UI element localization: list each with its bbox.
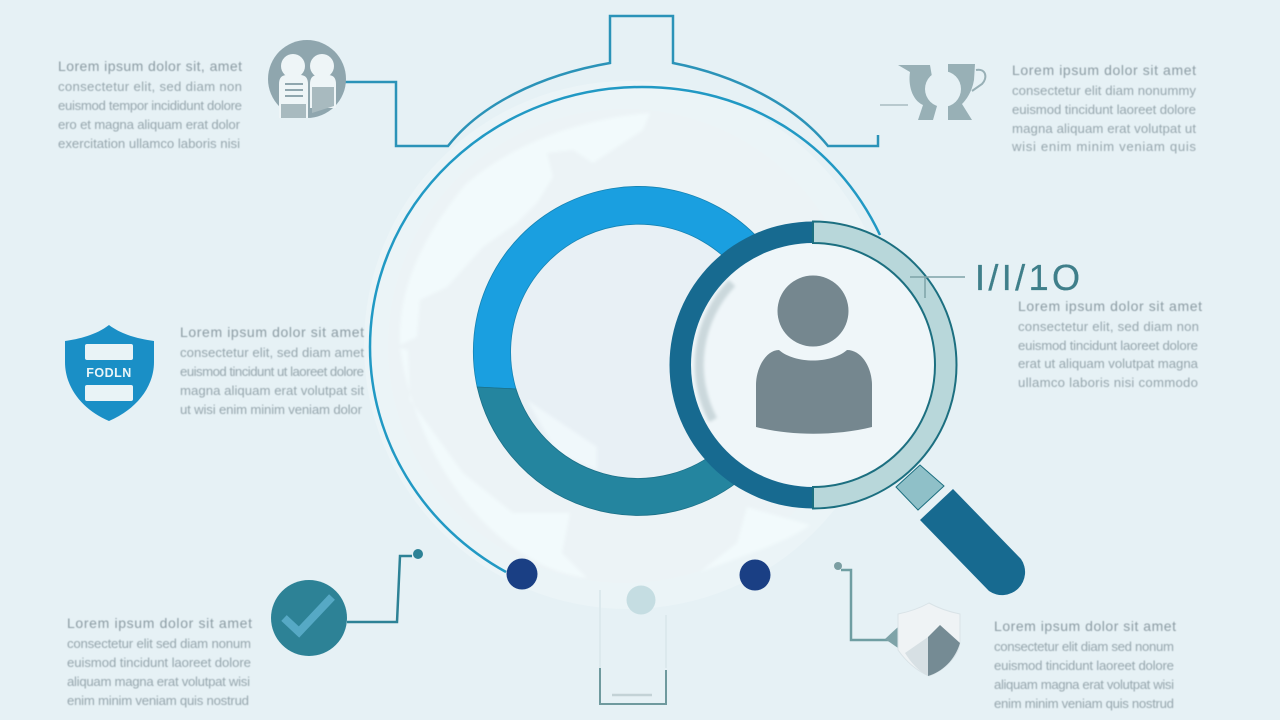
- text block: bottom right: [994, 618, 1176, 711]
- continent fragment in donut hole: [527, 400, 597, 470]
- text block: bottom left: Lorem ipsum dolor sit amet: [67, 615, 252, 631]
- text block: middle left: euismod tincidunt ut laoreet dolore: [180, 364, 364, 379]
- icon: trophy cups: [880, 64, 985, 120]
- lens inner shadow: [699, 283, 732, 420]
- text block: bottom right: enim minim veniam quis nostrud: [994, 696, 1174, 711]
- donut segment: blue: [473, 186, 760, 389]
- text block: middle right: erat ut aliquam volutpat magna: [1018, 356, 1199, 371]
- magnifying glass: [670, 222, 1025, 595]
- dots on ring: [506, 558, 770, 614]
- text block: bottom left: [67, 615, 252, 708]
- top connector line: [345, 16, 878, 146]
- text block: top left: [58, 58, 242, 151]
- text block: top left: consectetur elit, sed diam non: [58, 79, 242, 94]
- text block: bottom left: euismod tincidunt laoreet dolore: [67, 655, 251, 670]
- text block: top left: exercitation ullamco laboris nisi: [58, 136, 240, 151]
- text block: middle left: ut wisi enim minim veniam dolor: [180, 402, 363, 417]
- outer halo: [364, 81, 892, 609]
- text block: top right: wisi enim minim veniam quis: [1011, 139, 1196, 154]
- text block: bottom right: Lorem ipsum dolor sit amet: [994, 618, 1176, 634]
- text block: middle right: [1018, 298, 1202, 390]
- lens rim right: [813, 222, 956, 508]
- globe backdrop: [364, 81, 892, 609]
- icon: shield badge: FODLN: [86, 366, 132, 380]
- outer blue ring: [370, 87, 880, 572]
- text block: middle left: magna aliquam erat volutpat sit: [180, 383, 364, 398]
- value callout: [910, 257, 1080, 298]
- text block: middle left: Lorem ipsum dolor sit amet: [180, 324, 364, 340]
- text block: bottom right: euismod tincidunt laoreet dolore: [994, 658, 1174, 673]
- text block: middle right: Lorem ipsum dolor sit amet: [1018, 298, 1202, 314]
- icon: people: [268, 40, 346, 118]
- text block: middle left: [180, 324, 364, 417]
- text block: bottom right: consectetur elit diam sed nonum: [994, 639, 1174, 654]
- icon: faceted shield with connector: [834, 562, 960, 676]
- text block: top right: consectetur elit diam nonummy: [1012, 83, 1196, 98]
- value callout: I/I/1O: [975, 257, 1080, 298]
- continent upper left: [400, 113, 650, 345]
- text block: middle right: ullamco laboris nisi commodo: [1018, 375, 1198, 390]
- bottom bracket: [600, 590, 666, 704]
- text block: bottom left: enim minim veniam quis nostrud: [67, 693, 249, 708]
- text block: middle left: consectetur elit, sed diam amet: [180, 345, 364, 360]
- text block: top left: Lorem ipsum dolor sit, amet: [58, 58, 242, 74]
- continent lower right: [700, 507, 810, 572]
- icon: check badge with connector: [271, 549, 423, 656]
- text block: top right: Lorem ipsum dolor sit amet: [1012, 62, 1196, 78]
- handle: [920, 489, 1025, 595]
- text block: bottom left: consectetur elit sed diam nonum: [67, 636, 251, 651]
- text block: top right: euismod tincidunt laoreet dolore: [1012, 102, 1196, 117]
- icon: shield badge: [65, 325, 154, 421]
- lens fill: [689, 241, 937, 489]
- text block: bottom left: aliquam magna erat volutpat wisi: [67, 674, 250, 689]
- person icon: [756, 276, 872, 434]
- handle neck: [896, 465, 944, 510]
- donut chart: [473, 186, 766, 515]
- donut hole: [510, 222, 766, 478]
- continent lower left: [400, 348, 587, 578]
- text block: middle right: consectetur elit, sed diam non: [1018, 319, 1199, 334]
- lens rim left: [670, 222, 813, 508]
- donut segment: teal: [477, 387, 745, 515]
- text block: top right: magna aliquam erat volutpat ut: [1012, 121, 1196, 136]
- globe disc: [388, 109, 862, 583]
- text block: middle right: euismod tincidunt laoreet dolore: [1018, 338, 1198, 353]
- text block: top right: [1011, 62, 1196, 154]
- text block: bottom right: aliquam magna erat volutpat wisi: [994, 677, 1174, 692]
- text block: top left: euismod tempor incididunt dolore: [58, 98, 242, 113]
- text block: top left: ero et magna aliquam erat dolor: [58, 117, 241, 132]
